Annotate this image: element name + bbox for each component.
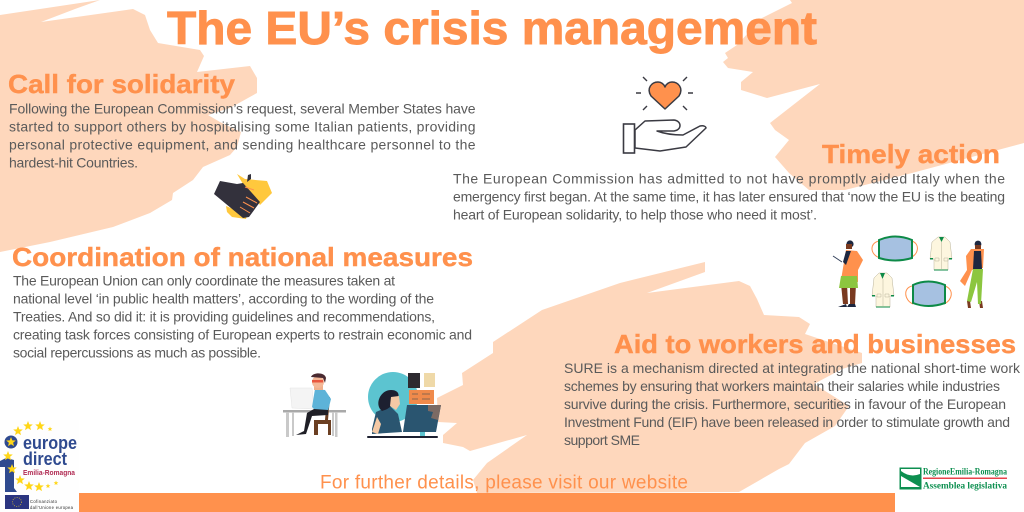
text block: call for solidarity: hardest-hit Countries. <box>9 154 138 170</box>
text block: call for solidarity <box>9 100 476 170</box>
logo: regione emilia-romagna assemblea legislativa <box>900 466 1007 492</box>
text block: aid to workers and businesses: survive during the crisis. Furthermore, securities in favour of the European <box>564 396 1006 412</box>
coat top <box>930 237 952 270</box>
background brush stroke: top right <box>723 0 1024 190</box>
illustration: man working at desk <box>283 373 346 437</box>
text block: timely action: The European Commission has admitted to not have promptly aided Italy when the <box>453 170 1005 186</box>
text block: aid to workers and businesses: support SME <box>564 432 640 448</box>
text block: coordination of national measures: social repercussions as much as possible. <box>13 344 261 360</box>
footer bar <box>79 493 895 512</box>
heading: call for solidarity: Call for solidarity <box>8 69 236 99</box>
logo: europe direct: Cofinanziato <box>30 499 58 504</box>
text block: timely action: heart of European solidarity, to help those who need it most’. <box>453 206 817 222</box>
text block: coordination of national measures <box>13 272 472 360</box>
logo: europe direct: europe <box>23 433 77 453</box>
title: The EU’s crisis management <box>167 2 817 54</box>
text block: aid to workers and businesses: Investment Fund (EIF) have been released in order to stimulate growth and <box>564 414 1010 430</box>
logo: europe direct: direct <box>23 449 67 469</box>
text block: aid to workers and businesses: schemes by ensuring that workers maintain their salaries while industries <box>564 378 1000 394</box>
text block: coordination of national measures: The European Union can only coordinate the measures taken at <box>13 272 395 288</box>
logo: europe direct: dall’Unione europea <box>30 505 74 510</box>
background brush stroke: bottom centre <box>437 262 862 493</box>
text block: timely action <box>453 170 1005 222</box>
text block: coordination of national measures: creating task forces consisting of European experts to restrain economic and <box>13 326 472 342</box>
text block: coordination of national measures: Treaties. And so did it: it is providing guidelines and recommendations, <box>13 308 435 324</box>
icon: handshake <box>214 174 272 219</box>
background brush stroke: top left <box>0 0 257 252</box>
text block: call for solidarity: Following the European Commission’s request, several Member States have <box>9 100 476 116</box>
mask bottom <box>906 282 951 306</box>
text block: aid to workers and businesses: SURE is a mechanism directed at integrating the national short-time work <box>564 360 1021 376</box>
icon: hand holding heart <box>624 77 706 153</box>
heading: coordination of national measures: Coordination of national measures <box>12 242 473 272</box>
logo: regione emilia-romagna assemblea legislativa: RegioneEmilia-Romagna <box>923 466 1007 476</box>
footer link text: For further details, please visit our website <box>320 472 688 494</box>
logo: europe direct: Emilia-Romagna <box>23 468 76 477</box>
woman in orange coat <box>833 240 863 307</box>
illustration: woman on the phone at a computer <box>367 372 441 438</box>
text block: aid to workers and businesses <box>564 360 1021 448</box>
man in orange coat <box>960 241 984 308</box>
text block: call for solidarity: personal protective equipment, and sending healthcare personnel to the <box>9 136 476 152</box>
heading: timely action: Timely action <box>822 139 1000 169</box>
text block: call for solidarity: started to support others by hospitalising some Italian patients, providing <box>9 118 476 134</box>
coat bottom <box>872 273 894 308</box>
mask top <box>872 236 917 260</box>
logo: regione emilia-romagna assemblea legislativa: Assemblea legislativa <box>923 482 1007 492</box>
text block: coordination of national measures: national level ‘in public health matters’, according to the wording of the <box>13 290 434 306</box>
logo: europe direct <box>0 420 79 512</box>
illustration: medical staff, masks and coats <box>833 236 984 308</box>
text block: timely action: emergency first began. At the same time, it has later ensured that ‘now the EU is the beating <box>453 188 1005 204</box>
heading: aid to workers and businesses: Aid to workers and businesses <box>614 329 1016 359</box>
